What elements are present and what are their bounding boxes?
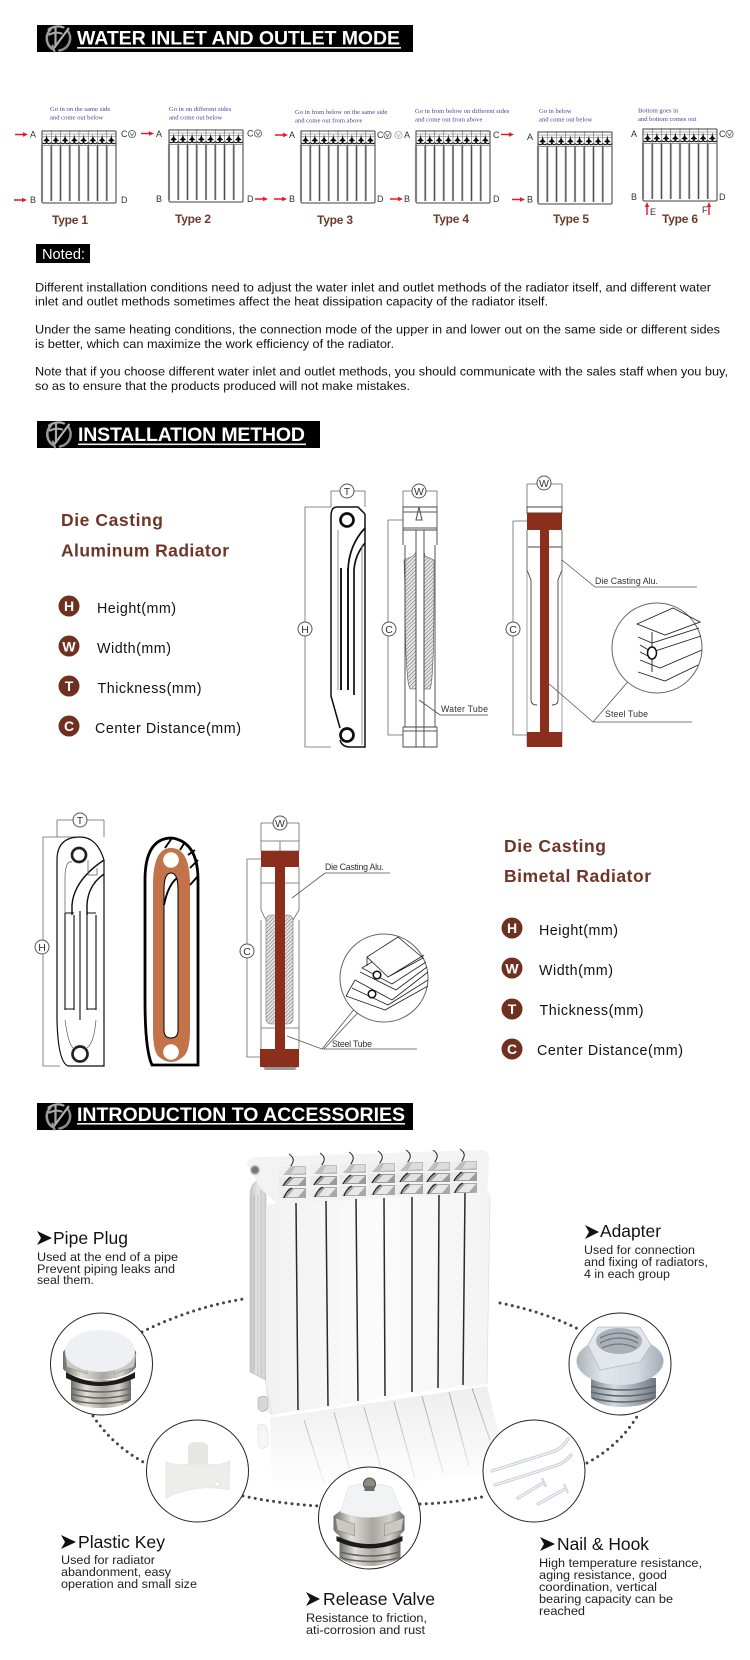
diagram: type 5: Go in below xyxy=(539,108,572,115)
legend: width xyxy=(58,636,171,657)
noted label xyxy=(36,244,90,263)
diagram: bimetal radiator cross section: W xyxy=(275,818,285,830)
legend: center distance: C xyxy=(507,1041,517,1057)
legend: thickness: Thickness(mm) xyxy=(98,681,202,697)
callout: plastic key: Plastic Key xyxy=(78,1532,165,1552)
callout: pipe plug: seal them. xyxy=(37,1273,94,1287)
diagram: type 3: Go in from below on the same side xyxy=(295,109,388,116)
diagram: type 6: Type 6 xyxy=(662,212,698,226)
diagram: type 2: B xyxy=(156,194,162,204)
diagram: type 5: A xyxy=(527,132,533,142)
radiator photo reflection xyxy=(258,1386,508,1492)
heading: installation method: INSTALLATION METHOD xyxy=(78,424,305,446)
diagram: type 2: Type 2 xyxy=(175,212,211,226)
legend: height xyxy=(502,918,618,939)
text block: notes: is better, which can maximize the work efficiency of the radiator. xyxy=(35,337,394,351)
diagram: type 1 xyxy=(14,106,136,227)
heading: introduction to accessories: INTRODUCTION TO ACCESSORIES xyxy=(77,1104,405,1126)
legend: width: W xyxy=(505,960,519,976)
callout: nail and hook xyxy=(539,1534,702,1618)
diagram: aluminum radiator cross section: W xyxy=(539,478,549,490)
accessory photo: pipe plug xyxy=(50,1313,152,1415)
callout: nail and hook: High temperature resistance, xyxy=(539,1556,702,1570)
diagram: aluminum radiator cross section xyxy=(506,476,702,747)
diagram: type 6: A xyxy=(631,129,637,139)
diagram: aluminum radiator front view: C xyxy=(385,624,393,636)
callout: plastic key xyxy=(61,1532,197,1591)
diagram: type 3: B xyxy=(289,194,295,204)
legend: height: Height(mm) xyxy=(539,923,618,939)
diagram: type 4 xyxy=(390,108,514,226)
callout: release valve: Release Valve xyxy=(323,1589,435,1609)
callout: adapter xyxy=(584,1221,708,1281)
diagram: type 6: C xyxy=(719,129,726,139)
legend: center distance: C xyxy=(64,718,74,734)
text block: notes xyxy=(35,280,728,393)
diagram: type 4: B xyxy=(404,194,410,204)
legend: width: W xyxy=(62,638,76,654)
callout: nail and hook: coordination, vertical xyxy=(539,1580,657,1594)
diagram: type 1: and come out below xyxy=(50,114,104,122)
callout: pipe plug: Used at the end of a pipe xyxy=(37,1250,178,1264)
callout: nail and hook: Nail & Hook xyxy=(557,1534,649,1554)
diagram: type 4: A xyxy=(404,130,410,140)
diagram: type 4: Type 4 xyxy=(433,212,469,226)
callout: plastic key: operation and small size xyxy=(61,1577,197,1591)
accessory photo: release valve xyxy=(318,1467,420,1569)
callout: release valve xyxy=(306,1589,435,1637)
callout: pipe plug: Prevent piping leaks and xyxy=(37,1262,175,1276)
diagram: type 4: and come out from above xyxy=(415,116,482,124)
diagram: bimetal radiator cross section xyxy=(240,816,428,1070)
diagram: type 5: and come out below xyxy=(539,116,593,124)
diagram: type 3: C xyxy=(377,130,384,140)
diagram: type 1: Go in on the same side xyxy=(50,106,110,113)
callout: plastic key: abandonment, easy xyxy=(61,1565,172,1579)
radiator photo xyxy=(247,1149,490,1415)
diagram: type 2: D xyxy=(247,194,254,204)
diagram: type 2: Go in on different sides xyxy=(169,106,232,113)
diagram: bimetal radiator cross section: C xyxy=(243,946,251,958)
diagram: type 6: Bottom goes in xyxy=(638,108,679,114)
legend: thickness: T xyxy=(508,1001,517,1017)
legend: center distance: Center Distance(mm) xyxy=(95,721,241,737)
callout: pipe plug: Pipe Plug xyxy=(53,1228,128,1248)
heading: water inlet and outlet mode xyxy=(37,25,413,52)
diagram: aluminum radiator cross section: Die Casting Alu. xyxy=(595,576,658,586)
diagram: aluminum radiator cross section: C xyxy=(509,624,517,636)
diagram: type 6: F xyxy=(702,205,708,215)
panel: connection types diagrams xyxy=(14,106,733,227)
legend: center distance xyxy=(58,716,241,737)
legend: thickness: T xyxy=(65,678,74,694)
diagram: aluminum radiator cross section: Steel Tube xyxy=(605,709,648,719)
diagram: type 4: D xyxy=(493,194,500,204)
diagram: type 2 xyxy=(141,106,268,226)
accessory photo: nail and hook xyxy=(483,1420,585,1522)
legend: height xyxy=(58,596,176,617)
diagram: type 1: A xyxy=(30,130,36,140)
diagram: aluminum radiator front view xyxy=(382,484,488,747)
legend: width xyxy=(502,958,613,979)
diagram: type 5 xyxy=(512,108,612,226)
callout: adapter: Adapter xyxy=(600,1221,661,1241)
diagram: type 6: and bottom comes out xyxy=(638,116,697,123)
callout: nail and hook: reached xyxy=(539,1604,585,1618)
accessory photo: adapter xyxy=(569,1313,671,1415)
callout: adapter: Used for connection xyxy=(584,1243,695,1257)
diagram: type 6: E xyxy=(650,207,656,217)
diagram: type 1: B xyxy=(30,195,36,205)
text block: notes: Under the same heating conditions, the connection mode of the upper in and lower out on the same side or different sides xyxy=(35,322,720,336)
diagram: bimetal radiator side view: T xyxy=(77,815,84,827)
callout: nail and hook: aging resistance, good xyxy=(539,1568,667,1582)
callout: adapter: and fixing of radiators, xyxy=(584,1255,708,1269)
diagram: type 2: A xyxy=(156,129,162,139)
panel: aluminum radiator legend xyxy=(58,510,241,737)
legend: height: Height(mm) xyxy=(97,601,176,617)
callout: plastic key: Used for radiator xyxy=(61,1553,155,1567)
diagram: type 6: D xyxy=(719,192,726,202)
legend: height: H xyxy=(64,598,74,614)
panel: bimetal radiator legend xyxy=(502,836,683,1060)
legend: width: Width(mm) xyxy=(539,963,613,979)
diagram: aluminum radiator front view: W xyxy=(414,486,424,498)
text block: notes: Note that if you choose different water inlet and outlet methods, you should communicate with the sales staff when you buy, xyxy=(35,364,728,378)
callout: release valve: ati-corrosion and rust xyxy=(306,1623,426,1637)
legend: thickness: Thickness(mm) xyxy=(540,1003,644,1019)
diagram: type 3: and come out from above xyxy=(295,118,362,124)
diagram: type 2: C xyxy=(247,128,254,138)
text block: notes: Different installation conditions need to adjust the water inlet and outlet methods of the radiator itself, and different water xyxy=(35,280,711,294)
diagram: bimetal radiator side view xyxy=(35,813,104,1066)
diagram: type 3 xyxy=(274,109,391,227)
diagram: type 2: and come out below xyxy=(169,114,223,122)
callout: pipe plug xyxy=(37,1228,178,1287)
legend: thickness xyxy=(58,676,202,697)
panel: aluminum radiator legend: Aluminum Radiator xyxy=(61,540,229,560)
diagram: bimetal radiator side view: H xyxy=(38,942,46,954)
diagram: type 1: Type 1 xyxy=(52,213,88,227)
diagram: type 3: D xyxy=(377,194,384,204)
callout: nail and hook: bearing capacity can be xyxy=(539,1592,673,1606)
noted label: Noted: xyxy=(42,247,85,263)
diagram: type 4: Go in from below on different sides xyxy=(415,108,510,115)
text block: notes: inlet and outlet methods sometimes affect the heat dissipation capacity of the radiator itself. xyxy=(35,294,548,308)
diagram: type 1: C xyxy=(121,129,128,139)
diagram: aluminum radiator side view xyxy=(298,484,365,747)
legend: thickness xyxy=(502,998,644,1020)
accessory photo: plastic key xyxy=(146,1420,248,1522)
panel: aluminum radiator legend: Die Casting xyxy=(61,510,163,530)
diagram: type 5: B xyxy=(527,194,533,204)
diagram: type 6: B xyxy=(631,192,637,202)
diagram: aluminum radiator side view: T xyxy=(344,486,351,498)
legend: center distance xyxy=(502,1038,683,1060)
diagram: type 3: A xyxy=(289,130,295,140)
diagram: bimetal radiator steel tube section xyxy=(145,838,198,1065)
panel: bimetal radiator legend: Die Casting xyxy=(504,836,606,856)
heading: installation method xyxy=(37,421,320,448)
diagram: type 3: Type 3 xyxy=(317,213,353,227)
diagram: type 1: D xyxy=(121,195,128,205)
legend: center distance: Center Distance(mm) xyxy=(537,1043,683,1059)
callout: release valve: Resistance to friction, xyxy=(306,1611,427,1625)
heading: water inlet and outlet mode: WATER INLET AND OUTLET MODE xyxy=(77,28,400,50)
diagram: type 5: Type 5 xyxy=(553,212,589,226)
dotted connector ring xyxy=(93,1299,638,1506)
diagram: type 4: C xyxy=(493,130,500,140)
diagram: aluminum radiator front view: Water Tube xyxy=(441,704,488,714)
callout: adapter: 4 in each group xyxy=(584,1267,670,1281)
diagram: bimetal radiator cross section: Die Casting Alu. xyxy=(325,862,384,872)
legend: width: Width(mm) xyxy=(97,641,171,657)
legend: height: H xyxy=(507,920,517,936)
diagram: type 6 xyxy=(631,108,733,226)
panel: bimetal radiator legend: Bimetal Radiator xyxy=(504,866,651,886)
text block: notes: so as to ensure that the products produced will not make mistakes. xyxy=(35,379,410,393)
diagram: bimetal radiator cross section: Steel Tube xyxy=(332,1039,372,1049)
diagram: aluminum radiator side view: H xyxy=(301,624,309,636)
